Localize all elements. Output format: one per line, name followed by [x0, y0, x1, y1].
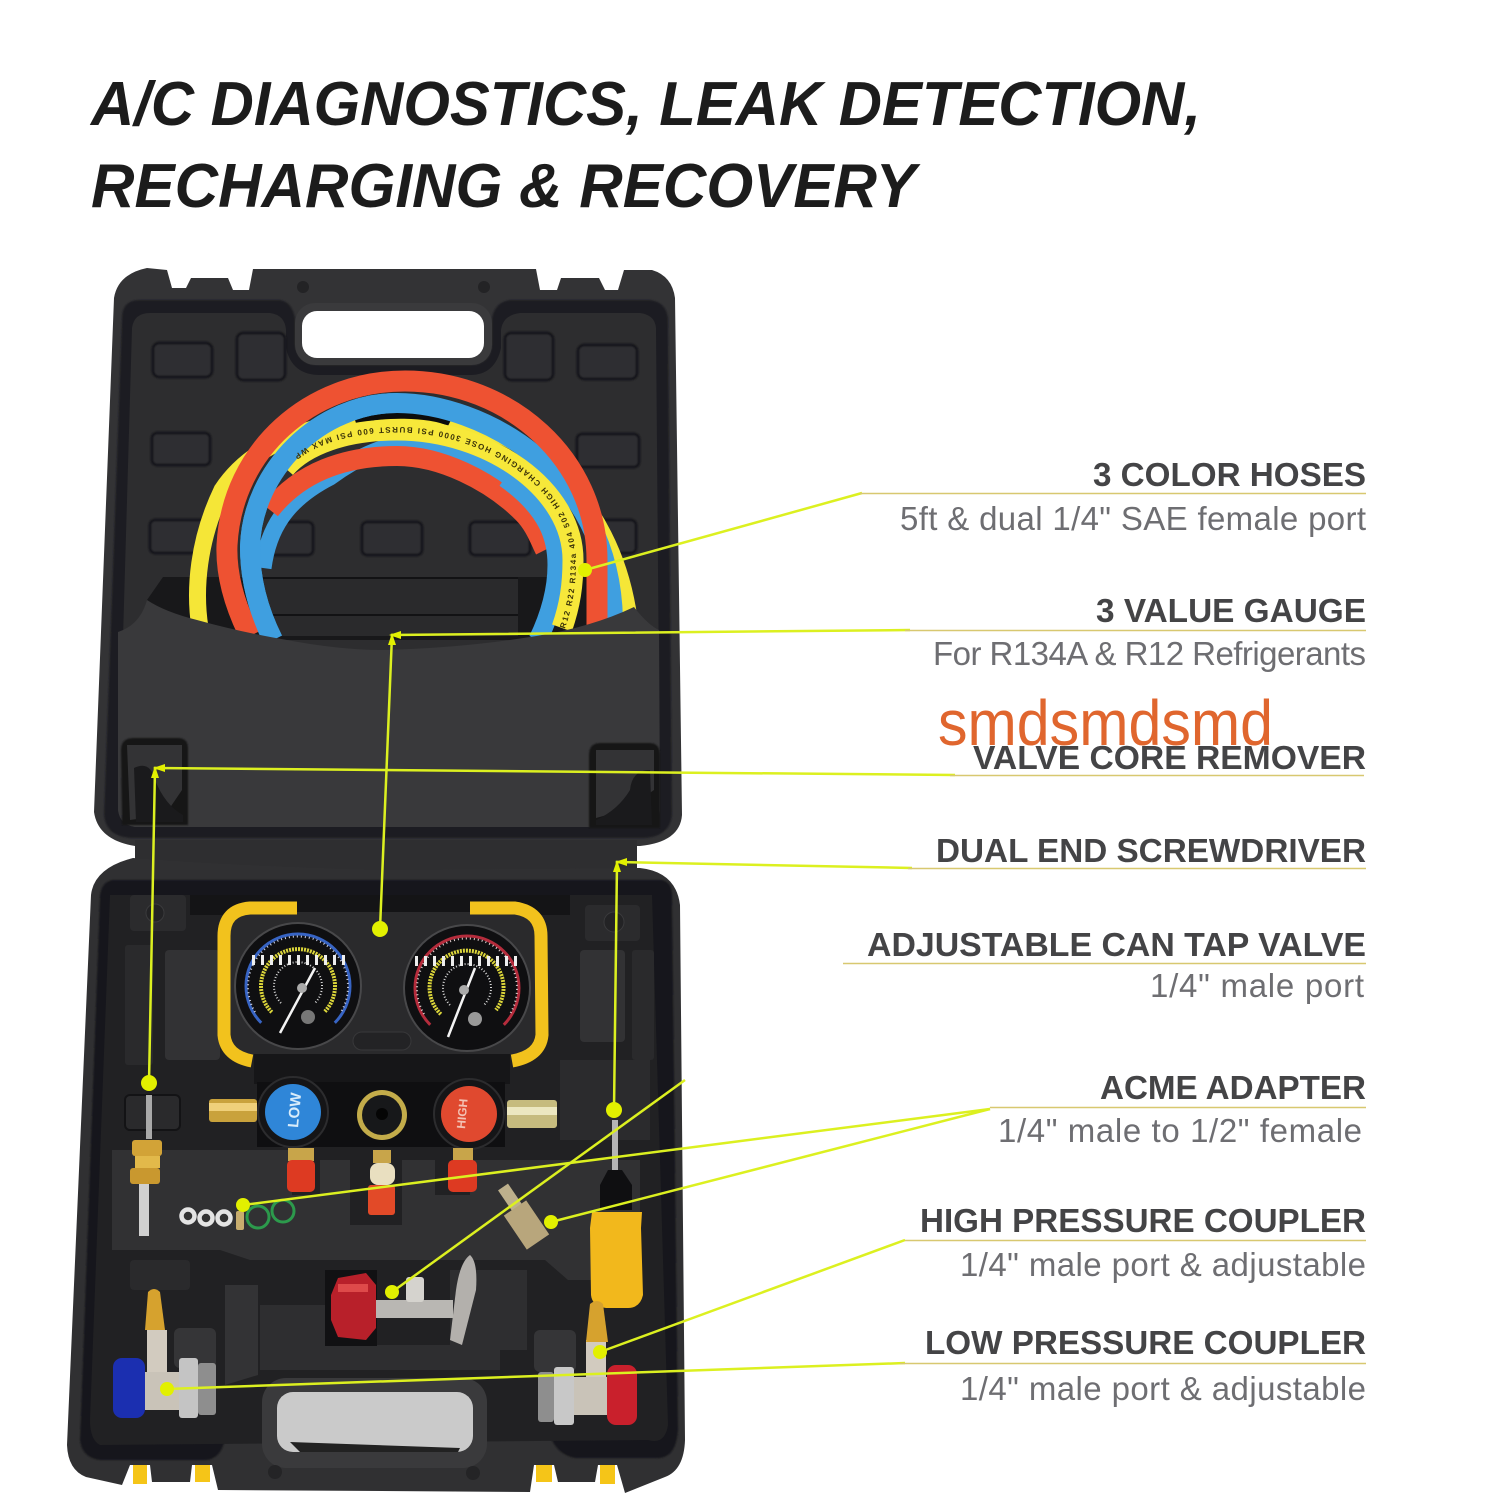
callout: low pressure coupler: LOW PRESSURE COUPLER: [925, 1324, 1366, 1361]
callout: 3 value gauge: For R134A & R12 Refrigerants: [933, 635, 1366, 672]
dual end screwdriver: [590, 1120, 643, 1308]
leader dots and arrowheads: [141, 563, 627, 1396]
title: A/C DIAGNOSTICS, LEAK DETECTION,: [89, 70, 1201, 139]
gauge panel: [228, 912, 536, 1054]
brass side fittings: [209, 1099, 557, 1128]
low pressure gauge dial: [235, 923, 361, 1049]
sight glass: [357, 1090, 407, 1140]
callout: 3 value gauge: 3 VALUE GAUGE: [1096, 592, 1366, 629]
base plates: [112, 895, 654, 1385]
callout: adjustable can tap valve: [843, 926, 1366, 1004]
hose printing: R12 R22 R134a 404 502 HIGH CHARGING HOSE 3000 PSI BURST 600 PSI MAX WP: [296, 427, 576, 628]
acme adapter: [503, 1187, 538, 1242]
callout: acme adapter: 1/4" male to 1/2" female: [998, 1112, 1362, 1149]
callout: adjustable can tap valve: 1/4" male port: [1150, 967, 1364, 1004]
low knob: LOW: [285, 1091, 305, 1128]
hoses: [189, 370, 636, 638]
high knob: HIGH: [454, 1098, 471, 1129]
callout: high pressure coupler: [905, 1202, 1366, 1283]
watermark: smdsmdsmd: [938, 687, 1273, 759]
leader lines: [149, 493, 990, 1389]
manifold block: [257, 1082, 505, 1147]
high pressure coupler: [538, 1301, 637, 1425]
lid moulded blocks: [150, 333, 639, 555]
handle opening: [262, 1378, 487, 1468]
pocket flap: [118, 600, 660, 827]
washers and o-rings: [182, 1200, 294, 1230]
callout: high pressure coupler: 1/4" male port & adjustable: [960, 1246, 1366, 1283]
callout: 3 color hoses: 5ft & dual 1/4" SAE female port: [900, 500, 1366, 537]
valve core remover tool: [130, 1095, 162, 1236]
callout: low pressure coupler: 1/4" male port & adjustable: [960, 1370, 1366, 1407]
callout: dual end screwdriver: DUAL END SCREWDRIVER: [936, 832, 1366, 869]
low pressure coupler: [113, 1289, 216, 1418]
callout: valve core remover: VALVE CORE REMOVER: [973, 739, 1366, 776]
callout: adjustable can tap valve: ADJUSTABLE CAN TAP VALVE: [867, 926, 1366, 963]
case base: [67, 858, 685, 1493]
gauge set: [209, 908, 557, 1215]
panel: open tool case: [67, 268, 685, 1493]
title: RECHARGING & RECOVERY: [91, 152, 921, 221]
title: [89, 70, 1201, 221]
lid corner latches: [121, 738, 660, 828]
yellow frame: [224, 908, 542, 1061]
callout: 3 color hoses: 3 COLOR HOSES: [1093, 456, 1366, 493]
low knob: [258, 1077, 328, 1147]
high knob: [434, 1079, 504, 1149]
handle opening: [295, 303, 492, 365]
manifold neck: [254, 1050, 510, 1084]
callout: 3 color hoses: [860, 456, 1366, 537]
case lid: [94, 268, 682, 846]
callout: 3 value gauge: [905, 592, 1366, 672]
callout: high pressure coupler: HIGH PRESSURE COUPLER: [920, 1202, 1366, 1239]
high pressure gauge dial: [404, 925, 530, 1051]
can tap valve: [331, 1255, 476, 1345]
pocket opening: [147, 577, 634, 640]
callout: acme adapter: ACME ADAPTER: [1100, 1069, 1366, 1106]
yellow feet: [133, 1465, 615, 1484]
hinge: [135, 840, 637, 890]
hose ports: [287, 1148, 477, 1215]
callout: acme adapter: [990, 1069, 1366, 1149]
callout: low pressure coupler: [900, 1324, 1366, 1407]
